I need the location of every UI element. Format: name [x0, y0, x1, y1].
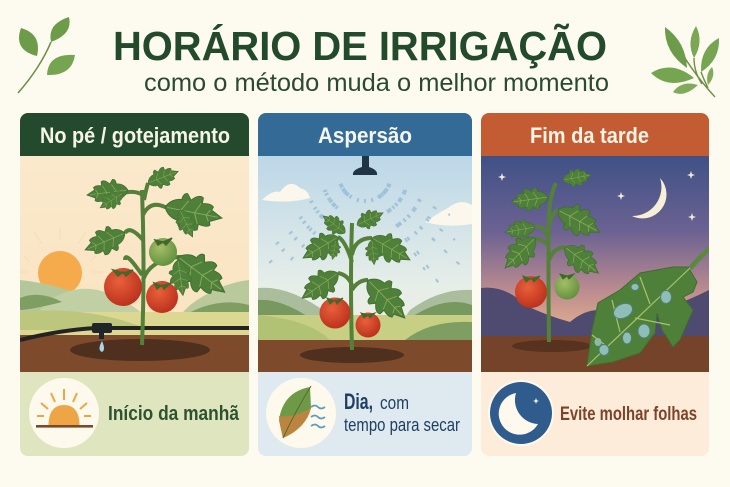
- footer band: [258, 372, 472, 456]
- stars: [498, 171, 696, 221]
- hills and fields: [258, 288, 472, 342]
- wet leaf with droplets: [587, 245, 710, 366]
- icon: moon badge: [488, 380, 554, 446]
- tomato plant: [84, 167, 226, 346]
- drip hose: [20, 323, 249, 352]
- scene sky: [20, 156, 249, 312]
- icon: left leaf sprig: [18, 17, 75, 93]
- panel: fim da tarde: [481, 113, 710, 456]
- tomato plant: [301, 210, 411, 350]
- panel: no pé / gotejamento: [18, 113, 249, 456]
- footer text: Dia,: [344, 389, 373, 414]
- icon: sprinkler head: [353, 156, 377, 175]
- scene sky: [481, 156, 709, 322]
- footer band: [481, 372, 709, 456]
- header label: Aspersão: [318, 123, 412, 148]
- icon: rising sun with rays: [18, 228, 104, 295]
- soil: [20, 335, 249, 372]
- title: HORÁRIO DE IRRIGAÇÃO: [113, 23, 607, 69]
- icon: crescent moon: [632, 178, 666, 218]
- icon: sunrise: [29, 378, 99, 448]
- scene sky: [258, 156, 472, 315]
- header bar: [481, 113, 709, 156]
- panel: aspersão: [258, 113, 472, 456]
- clouds: [262, 184, 472, 226]
- footer band: [20, 372, 249, 456]
- soil: [258, 340, 472, 372]
- footer text: com: [380, 393, 409, 413]
- header bar: [258, 113, 472, 156]
- footer text: [344, 389, 460, 435]
- tomato plant: [504, 168, 601, 342]
- soil: [481, 336, 709, 372]
- footer text: Início da manhã: [108, 403, 240, 425]
- water spray: [267, 175, 460, 285]
- subtitle: como o método muda o melhor momento: [144, 69, 609, 97]
- distant hills: [481, 288, 709, 336]
- hills and fields: [20, 280, 249, 340]
- icon: right leaf sprig: [651, 26, 719, 97]
- icon: drying leaf: [266, 378, 336, 448]
- header bar: [20, 113, 249, 156]
- footer text: tempo para secar: [344, 415, 460, 435]
- header label: No pé / gotejamento: [40, 123, 230, 148]
- header label: Fim da tarde: [530, 123, 649, 148]
